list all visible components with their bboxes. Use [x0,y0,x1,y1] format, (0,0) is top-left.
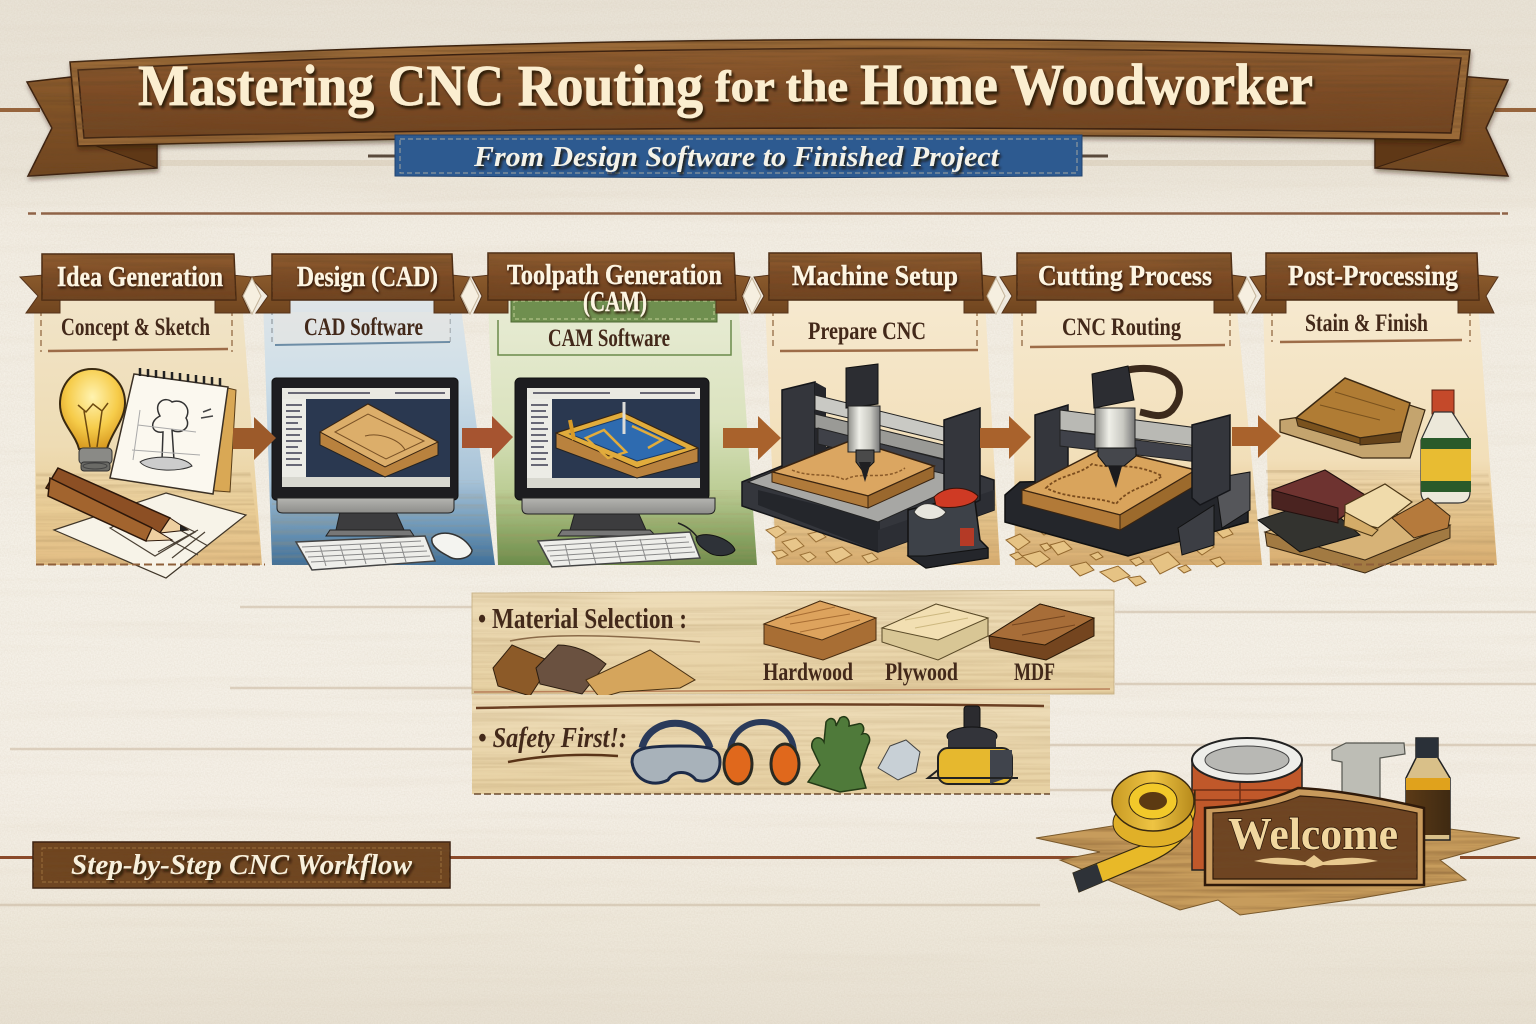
ribbon: machine setup: Machine Setup [792,261,958,292]
title banner [0,39,1536,176]
sub-label: concept & sketch: Concept & Sketch [61,314,210,341]
icon: notebook sketch [110,368,236,494]
dashed panel base line [36,564,1498,566]
tape measure [1073,771,1195,892]
panel: idea generation [34,300,262,578]
arrow: design to cam [462,416,513,459]
ribbon: toolpath generation cam: (CAM) [583,287,647,318]
icon: finish bottle [1421,390,1471,503]
icon: monitor with toolpath [515,378,715,536]
main title: Mastering CNC Routing [138,53,703,118]
welcome sign: Welcome [1228,808,1398,859]
arrow: idea to design [233,417,276,460]
welcome sign [1205,788,1424,885]
icon: mouse [432,533,472,559]
ribbon: post-processing: Post-Processing [1288,261,1458,292]
icon: pencils [46,468,188,541]
icon: sanding blocks [1258,470,1450,573]
wood boards [1036,820,1520,915]
sub-label: stain & finish: Stain & Finish [1305,310,1428,337]
ribbon: idea generation: Idea Generation [57,262,223,293]
spray nozzle [1332,743,1405,805]
icon: hardwood sample [764,601,876,660]
label: mdf: MDF [1014,659,1055,686]
icon: work gloves [808,717,870,792]
oil bottle [1406,738,1450,840]
icon: light bulb [60,369,125,471]
corner scene: welcome sign and tools [1036,738,1520,915]
panel: design cad [263,300,495,570]
footer tag: step-by-step [0,842,1536,888]
icon: cnc machine with router [1005,366,1250,556]
icon: safety goggles [632,723,720,783]
ribbon: cutting process: Cutting Process [1038,261,1212,292]
arrow: setup to cutting [980,416,1031,459]
icon: keyboard [538,532,700,567]
icon: paper plan [54,493,246,578]
ribbon: design cad: Design (CAD) [297,262,438,293]
panel: machine setup [742,300,1000,568]
icon: finished boards [1280,378,1425,458]
icon: plywood sample [882,604,988,660]
sub-label: prepare cnc: Prepare CNC [808,318,926,345]
sub-label: cnc routing: CNC Routing [1062,314,1181,341]
icon: tape spool [928,706,1018,784]
main title: for the [715,62,848,111]
arrow: cam to setup [723,416,781,460]
ribbon: cutting process [1000,253,1246,313]
ribbon: toolpath generation cam: Toolpath Generation [507,260,722,291]
icon: cnc machine [742,364,994,552]
heading: safety first: • Safety First!: [478,723,627,754]
icon: ear muffs [724,722,799,784]
icon: wood samples [493,645,695,698]
sub-label: cad software: CAD Software [304,314,423,341]
icon: wood chips pile [1006,525,1233,586]
banner left tail [27,76,157,176]
footer tag: step-by-step: Step-by-Step CNC Workflow [71,849,413,881]
icon: mouse [678,523,735,556]
ribbon: machine setup [754,253,996,313]
paint can [1192,738,1302,870]
icon: monitor with wood model [272,378,458,536]
banner body [70,39,1470,146]
panel: safety first [472,695,1050,794]
connector diamonds [243,278,1256,314]
ribbon: post-processing [1250,253,1498,313]
ribbon: toolpath generation cam [472,253,750,318]
panel: cutting process [1005,300,1262,586]
panel: toolpath cam [488,298,757,567]
icon: mdf sample [989,604,1094,660]
icon: chips [766,526,878,563]
ribbon: design cad [250,254,470,313]
heading: material selection: • Material Selection : [478,604,687,635]
icon: keyboard [296,536,435,570]
subtitle ribbon [368,135,1108,178]
arrow: cutting to post [1232,415,1281,458]
sub-label: cam software: CAM Software [548,325,670,352]
label: hardwood: Hardwood [763,659,853,686]
ribbon: idea generation [20,254,252,313]
main title: Home Woodworker [860,52,1313,117]
subtitle ribbon: From Design Software to Finished Project [473,141,1000,173]
panel: post-processing [1258,300,1497,573]
icon: power tool box [908,488,988,568]
banner right tail [1375,76,1508,176]
label: plywood: Plywood [885,659,958,686]
panel: material selection [472,590,1114,698]
icon: ear plugs [878,740,920,780]
